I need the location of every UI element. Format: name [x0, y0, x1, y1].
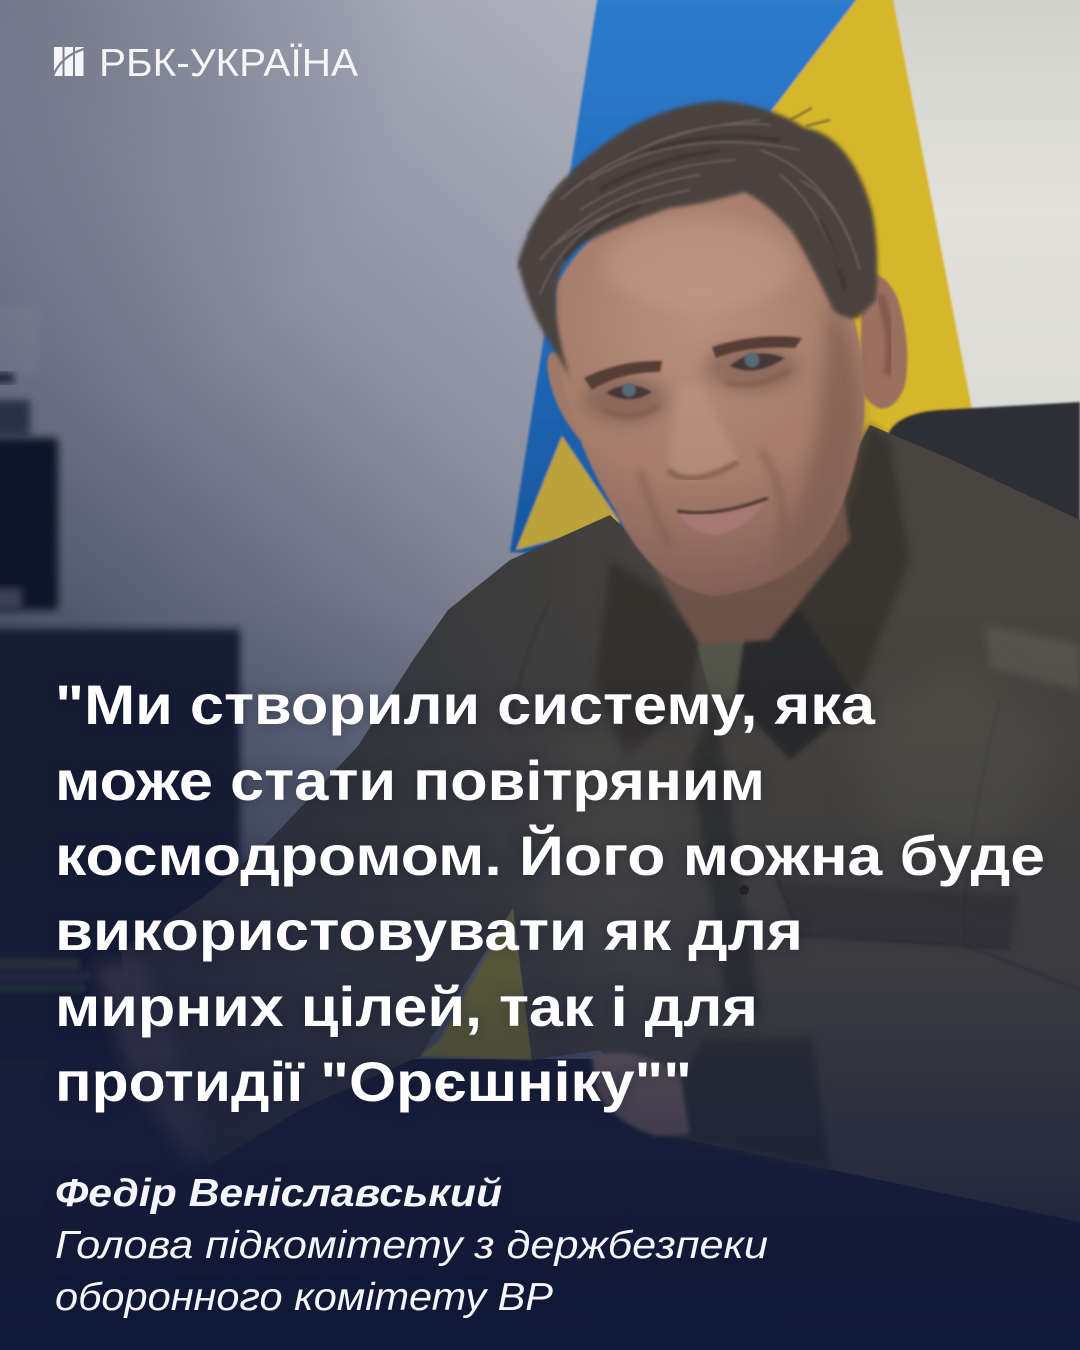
light folds — [850, 660, 1060, 880]
quote: використовувати як для — [55, 899, 803, 962]
attribution: Голова підкомітету з держбезпеки — [55, 1224, 768, 1267]
face shadows — [770, 300, 861, 575]
logo icon — [53, 47, 84, 76]
ear right — [860, 274, 907, 409]
quote: може стати повітряним — [55, 749, 765, 812]
man: head — [518, 101, 907, 645]
mouth — [677, 498, 768, 535]
face — [555, 187, 864, 596]
attribution: оборонного комітету ВР — [55, 1276, 553, 1319]
forehead highlight — [605, 220, 795, 310]
stack of books — [0, 958, 90, 992]
hair — [518, 101, 877, 378]
laptop edge — [600, 1322, 790, 1350]
hand right — [592, 1053, 690, 1136]
quote: "Ми створили систему, яка — [55, 673, 876, 736]
attribution: Федір Веніславський — [55, 1172, 502, 1215]
background: dark office furniture — [0, 305, 240, 1350]
hand left — [95, 960, 210, 1170]
quote: космодромом. Його можна буде — [55, 824, 1045, 887]
cuff — [661, 1038, 830, 1170]
table — [0, 1059, 1080, 1350]
ukrainian flag — [420, 0, 972, 1060]
quote: мирних цілей, так і для — [55, 975, 758, 1038]
logo wordmark: РБК-УКРАЇНА — [99, 42, 358, 85]
man: shirt and arms — [95, 425, 1080, 1222]
pocket and seams — [778, 882, 1019, 948]
eyes — [606, 385, 652, 399]
logo — [53, 42, 358, 85]
ear left — [547, 352, 590, 440]
quote: протидії "Орєшніку"" — [55, 1050, 692, 1113]
office chair — [888, 402, 1080, 560]
nose — [668, 385, 738, 479]
neck — [650, 470, 850, 645]
quote — [55, 673, 1045, 1113]
collar and placket — [780, 425, 910, 690]
eyebrows — [584, 361, 662, 390]
attribution — [55, 1172, 768, 1319]
